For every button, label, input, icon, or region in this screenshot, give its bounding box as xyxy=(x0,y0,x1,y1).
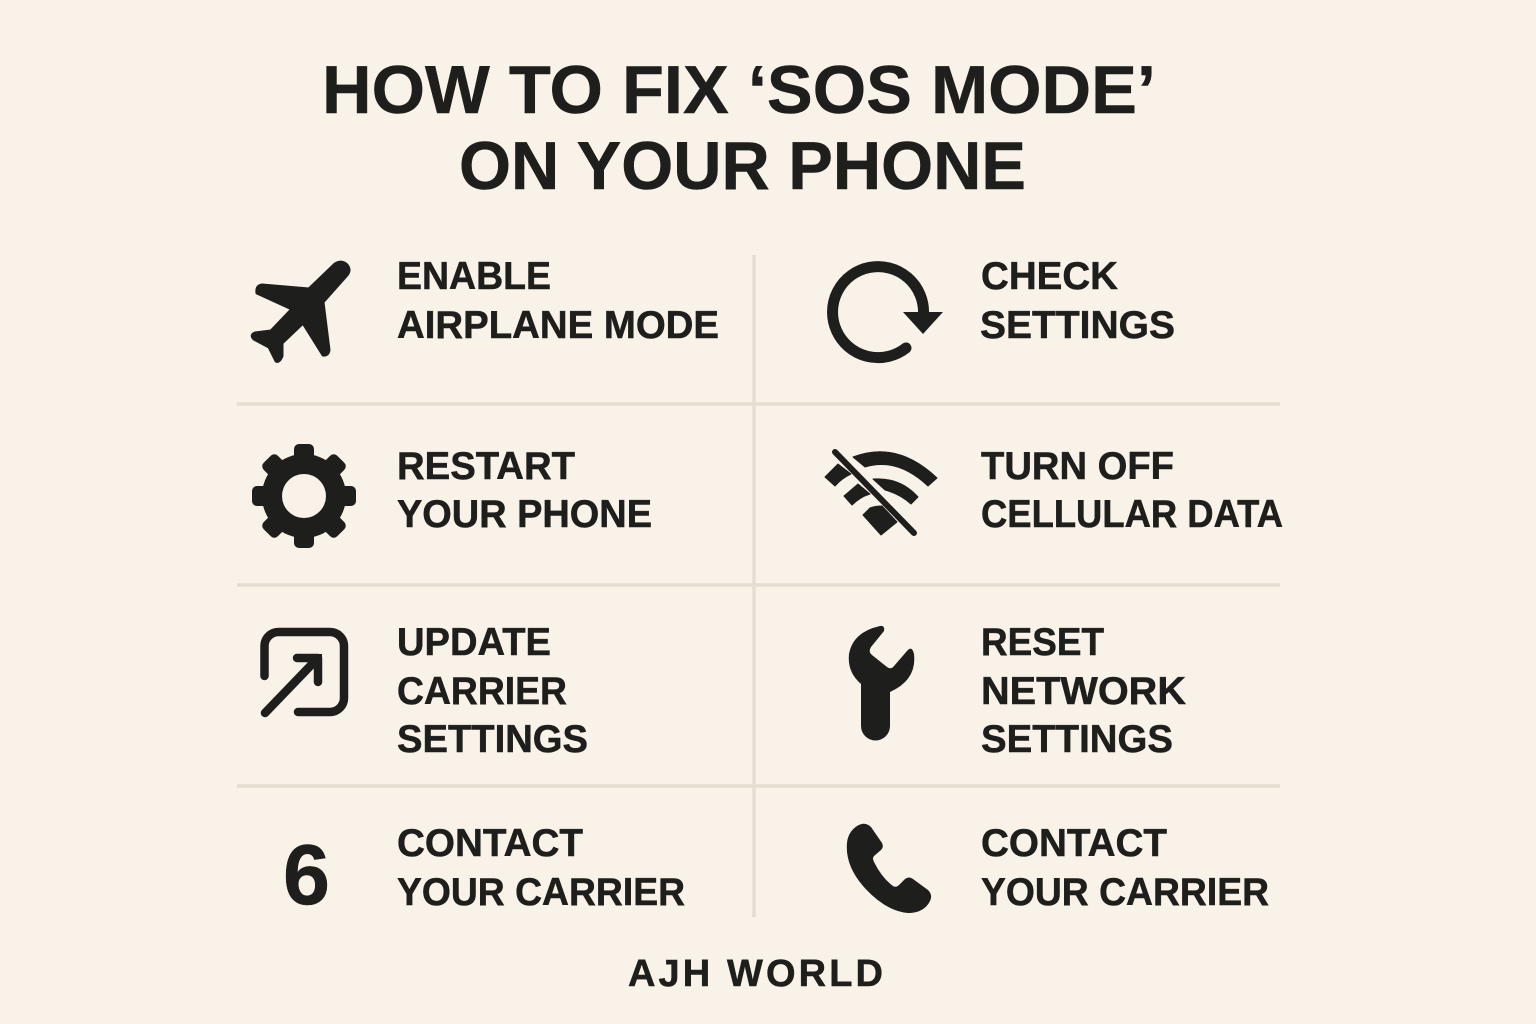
icon: gear xyxy=(252,444,356,548)
panel: enable airplane mode xyxy=(252,255,719,361)
label: turn off cellular data: CELLULAR DATA xyxy=(981,493,1283,536)
label: check settings: CHECK xyxy=(981,255,1118,298)
label: enable airplane mode: ENABLE xyxy=(397,255,551,298)
label: contact your carrier xyxy=(981,822,1269,914)
panel: reset network settings xyxy=(849,621,1186,761)
label: turn off cellular data xyxy=(981,445,1283,536)
label: check settings: SETTINGS xyxy=(980,304,1175,347)
label: enable airplane mode xyxy=(397,255,719,347)
title: ON YOUR PHONE xyxy=(459,128,1026,204)
panel: contact your carrier (step 6) xyxy=(283,822,685,923)
title: HOW TO FIX ‘SOS MODE’ xyxy=(322,52,1156,128)
label: restart your phone: RESTART xyxy=(397,445,575,488)
title xyxy=(322,52,1156,204)
label: enable airplane mode: AIRPLANE MODE xyxy=(397,304,719,347)
label: restart your phone xyxy=(397,445,652,536)
label: turn off cellular data: TURN OFF xyxy=(981,445,1174,488)
label: contact your carrier: CONTACT xyxy=(397,822,583,865)
label: contact your carrier xyxy=(397,822,685,914)
label: reset network settings: SETTINGS xyxy=(981,718,1173,761)
icon: number 6: 6 xyxy=(283,828,330,923)
label: update carrier settings: UPDATE xyxy=(397,621,551,664)
label: reset network settings: RESET xyxy=(981,621,1104,664)
label: contact your carrier: CONTACT xyxy=(981,822,1167,865)
panel: turn off cellular data xyxy=(825,445,1283,536)
label: update carrier settings: CARRIER xyxy=(397,670,567,713)
panel: contact your carrier (phone) xyxy=(847,822,1269,914)
icon: telephone xyxy=(847,824,931,913)
panel: restart your phone xyxy=(252,444,652,548)
label: restart your phone: YOUR PHONE xyxy=(397,493,652,536)
panel: check settings xyxy=(833,255,1175,358)
label: contact your carrier: YOUR CARRIER xyxy=(397,871,685,914)
icon: arrow in square xyxy=(264,632,344,713)
footer brand: AJH WORLD xyxy=(628,953,883,995)
label: contact your carrier: YOUR CARRIER xyxy=(981,871,1269,914)
label: check settings xyxy=(980,255,1175,347)
icon: wifi off xyxy=(825,452,937,535)
label: update carrier settings xyxy=(397,621,588,761)
label: reset network settings xyxy=(981,621,1186,761)
icon: wrench xyxy=(849,626,914,740)
panel: update carrier settings xyxy=(264,621,588,761)
icon: circular arrow xyxy=(833,267,943,358)
label: update carrier settings: SETTINGS xyxy=(397,718,588,761)
label: reset network settings: NETWORK xyxy=(981,670,1186,713)
icon: airplane xyxy=(252,262,349,361)
